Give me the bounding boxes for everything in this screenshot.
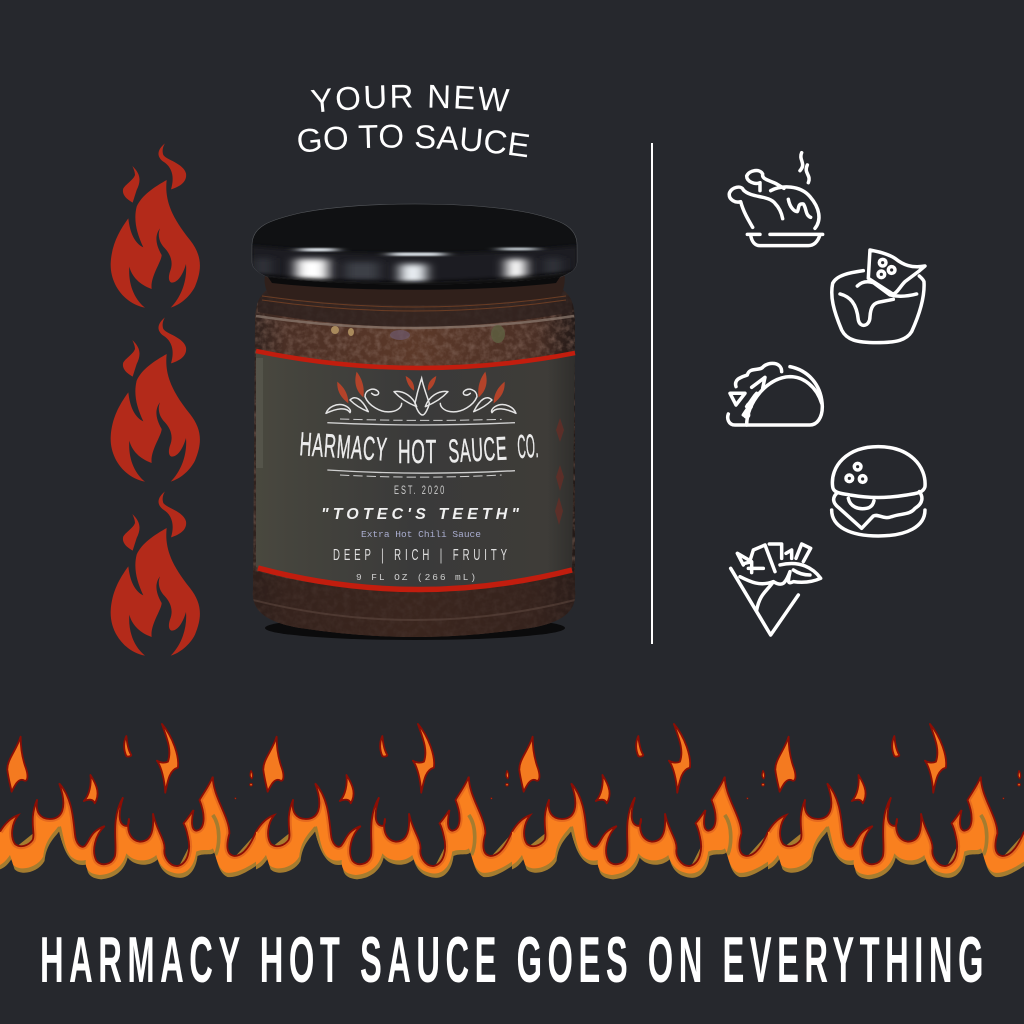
icon: fries cone [731, 544, 821, 635]
icon: taco [728, 363, 822, 425]
label brand name [299, 425, 539, 470]
icon: flame 1 [111, 143, 200, 308]
label est.: EST. 2020 [394, 484, 445, 498]
heading: your new go to sauce: GO TO SAUCE [298, 124, 530, 158]
jar shadow [265, 616, 565, 640]
heading: your new go to sauce: YOUR NEW [310, 84, 510, 112]
flame border band [0, 724, 1024, 879]
label flavor notes: DEEP | RICH | FRUITY [333, 545, 507, 564]
vertical divider [651, 143, 653, 644]
jar lid [252, 204, 577, 292]
label variety name: "TOTEC'S TEETH" [321, 506, 519, 523]
heading: your new go to sauce [298, 84, 530, 158]
label brand name: SAUCE [447, 429, 508, 469]
food icons [728, 153, 925, 635]
label ornament [326, 372, 516, 477]
heat rating: three red flames [111, 143, 200, 656]
icon: flame 3 [111, 491, 200, 656]
jar body [250, 285, 580, 640]
icon: burger [832, 447, 925, 536]
icon: flame 2 [111, 317, 200, 482]
label brand name: HOT [398, 433, 437, 470]
jar label [256, 348, 576, 592]
label description: Extra Hot Chili Sauce [361, 529, 481, 540]
label brand name: HARMACY [299, 425, 389, 468]
label volume: 9 FL OZ (266 mL) [356, 572, 476, 583]
jar label: CO. [516, 427, 539, 465]
label side print [555, 418, 564, 525]
icon: nachos bowl [832, 250, 925, 343]
red band bottom [258, 568, 572, 590]
product: hot sauce jar [250, 204, 580, 640]
red band top [256, 351, 575, 368]
icon: roast chicken [729, 153, 823, 246]
jar neck [265, 272, 565, 305]
